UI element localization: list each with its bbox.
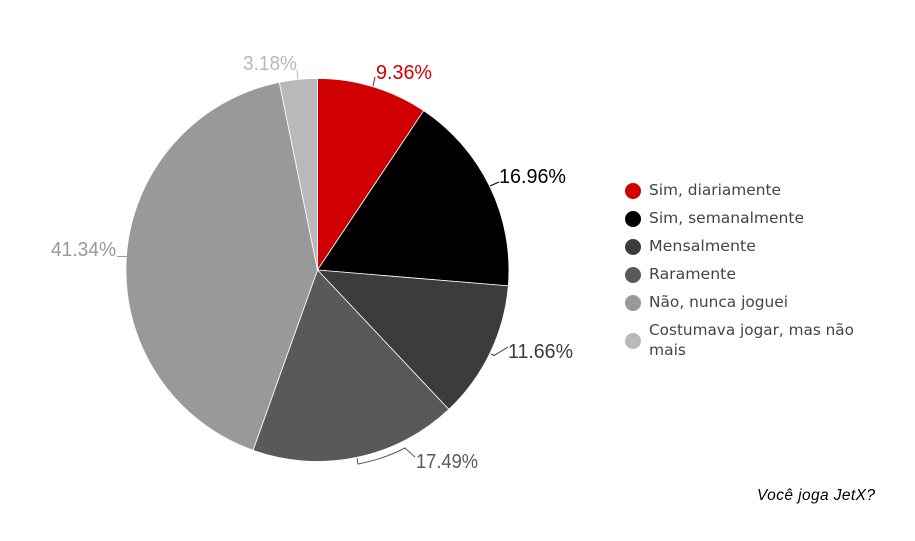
value: 3.18%: 3.18% <box>243 52 297 75</box>
slice: Sim, diariamente 9.36% <box>318 78 424 270</box>
value: 16.96%: 16.96% <box>499 165 566 188</box>
legend item: Não, nunca joguei: Não, nunca joguei <box>649 293 788 311</box>
pie chart <box>126 78 509 461</box>
slice: Costumava jogar, mas não mais 3.18% <box>279 78 318 270</box>
value labels <box>51 52 573 473</box>
value: 17.49%: 17.49% <box>416 450 478 473</box>
caption: Você joga JetX? <box>757 487 875 504</box>
legend item: Sim, semanalmente: Sim, semanalmente <box>649 209 804 227</box>
value: 41.34%: 41.34% <box>51 238 116 261</box>
legend <box>625 181 854 359</box>
legend item: Sim, diariamente: Sim, diariamente <box>649 181 781 199</box>
slice: Sim, semanalmente 16.96% <box>318 111 509 286</box>
legend item: Mensalmente: Mensalmente <box>649 237 756 255</box>
legend item: Costumava jogar, mas não mais: mais <box>649 341 686 359</box>
legend item: Costumava jogar, mas não mais: Costumava jogar, mas não <box>649 321 854 339</box>
value: 11.66%: 11.66% <box>508 340 573 363</box>
leader lines <box>117 70 508 464</box>
slice: Raramente 17.49% <box>253 270 449 461</box>
legend item: Costumava jogar, mas não mais <box>625 321 854 359</box>
legend item: Raramente: Raramente <box>649 265 736 283</box>
value: 9.36%: 9.36% <box>376 61 432 84</box>
slice: Não, nunca joguei 41.34% <box>126 82 318 450</box>
slice: Mensalmente 11.66% <box>318 270 508 409</box>
